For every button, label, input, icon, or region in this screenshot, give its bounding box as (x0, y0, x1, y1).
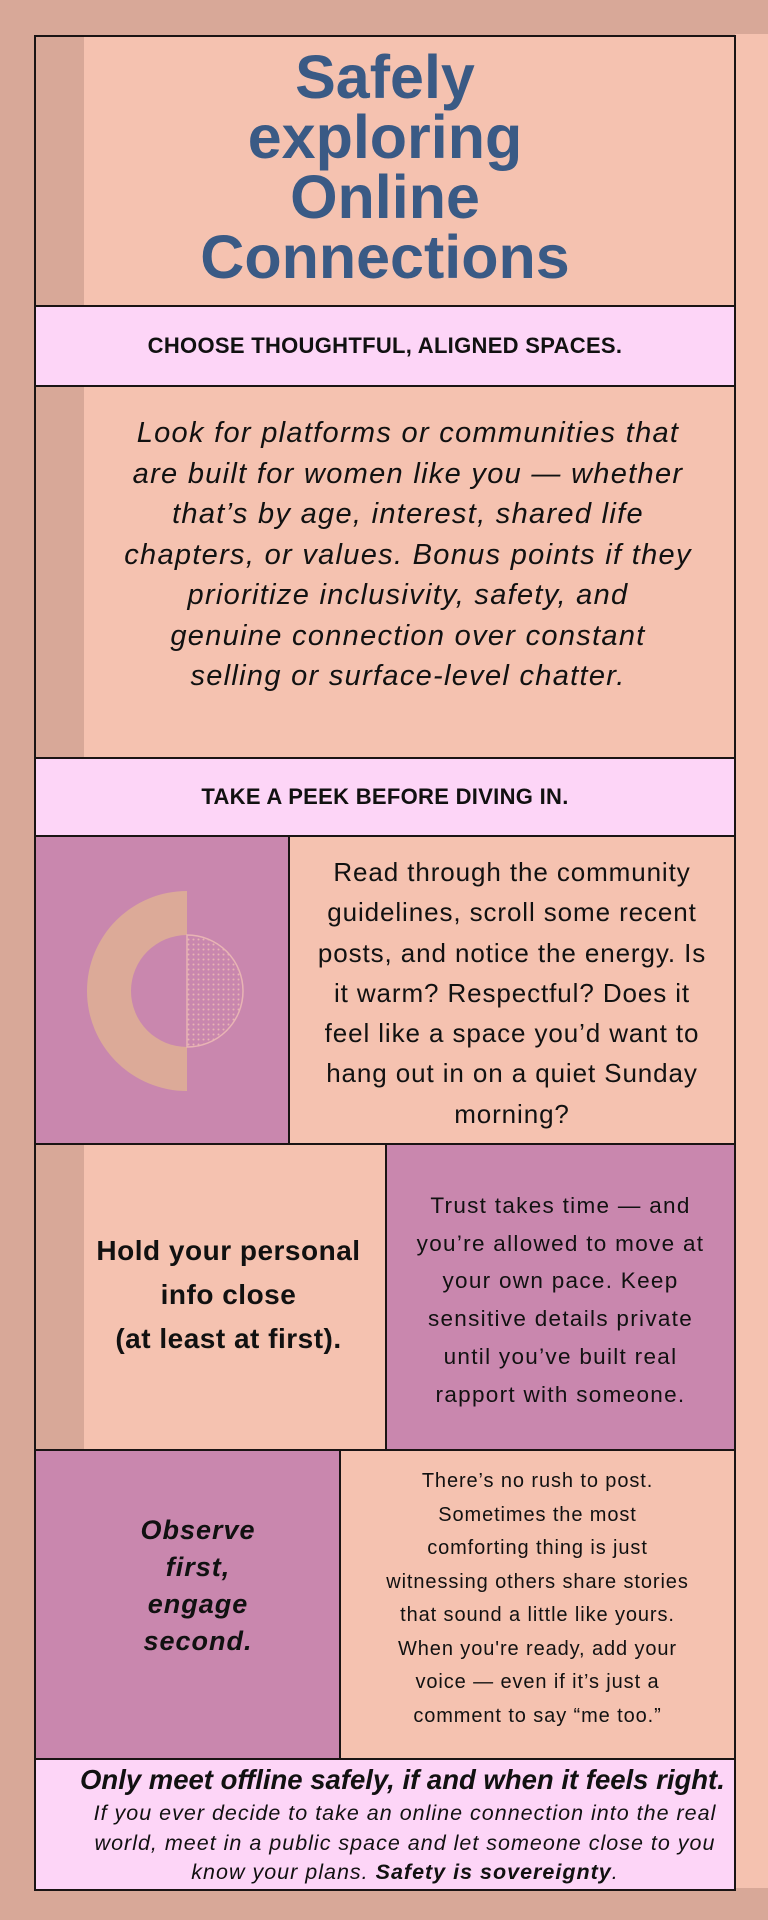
panel: meet offline (34, 1758, 736, 1891)
panel: observe text: witnessing others share stories (386, 1570, 689, 1592)
choose body text (124, 417, 692, 692)
panel: peek text (288, 835, 736, 1145)
panel: trust text: sensitive details private (428, 1306, 693, 1331)
offline body: If you ever decide to take an online connection into the real (94, 1801, 716, 1825)
panel: trust text: until you’ve built real (444, 1344, 677, 1369)
panel: peek text: it warm? Respectful? Does it (334, 978, 690, 1008)
panel: observe text: that sound a little like yours. (400, 1604, 675, 1626)
title: exploring (248, 103, 522, 171)
heading: choose spaces: CHOOSE THOUGHTFUL, ALIGNED SPACES. (148, 333, 622, 358)
choose body text: selling or surface-level chatter. (190, 660, 626, 692)
panel: observe heading: engage (148, 1589, 248, 1619)
offline body: know your plans. Safety is sovereignty. (191, 1860, 619, 1884)
panel: hold info (34, 1143, 387, 1451)
panel: trust text (385, 1143, 736, 1451)
choose body text: that’s by age, interest, shared life (172, 498, 644, 530)
choose body text: genuine connection over constant (170, 620, 646, 652)
panel: observe heading: Observe (140, 1515, 256, 1545)
offline heading: Only meet offline safely, if and when it feels right. (80, 1764, 725, 1795)
panel: trust text: your own pace. Keep (442, 1268, 679, 1293)
panel: peek text: guidelines, scroll some recent (327, 897, 697, 927)
panel: trust text: you’re allowed to move at (417, 1231, 704, 1256)
panel: peek text: morning? (454, 1099, 570, 1129)
panel: peek text: hang out in on a quiet Sunday (326, 1058, 698, 1088)
panel: observe text: voice — even if it’s just a (415, 1671, 660, 1693)
panel: observe text: comforting thing is just (427, 1537, 648, 1559)
panel: observe heading: second. (143, 1626, 253, 1656)
hold heading: info close (161, 1279, 296, 1310)
title: Connections (200, 223, 570, 291)
panel: observe heading (34, 1449, 341, 1760)
choose body text: Look for platforms or communities that (137, 417, 679, 449)
choose body text: chapters, or values. Bonus points if they (124, 538, 692, 570)
panel: observe text (339, 1449, 736, 1760)
hold heading: (at least at first). (115, 1323, 342, 1354)
hold heading (96, 1235, 361, 1354)
panel: peek text: posts, and notice the energy. Is (318, 938, 706, 968)
icon: half ring (87, 891, 244, 1091)
right peach strip (735, 34, 768, 1888)
panel: observe heading: first, (166, 1552, 230, 1582)
panel: observe text: When you're ready, add your (398, 1638, 677, 1660)
panel: peek text: feel like a space you’d want to (325, 1018, 699, 1048)
offline body: world, meet in a public space and let someone close to you (95, 1830, 715, 1854)
panel: trust text: rapport with someone. (436, 1382, 685, 1407)
panel: trust text: Trust takes time — and (430, 1193, 691, 1218)
title (200, 43, 570, 291)
panel: peek text: Read through the community (333, 857, 691, 887)
title: Safely (295, 43, 475, 111)
hold heading: Hold your personal (96, 1235, 361, 1266)
heading: take a peek (34, 757, 736, 837)
panel: observe text: comment to say “me too.” (413, 1704, 662, 1726)
choose body text: prioritize inclusivity, safety, and (188, 579, 628, 611)
heading: choose spaces (34, 305, 736, 387)
title: Online (290, 163, 480, 231)
title panel (34, 35, 736, 307)
panel: choose text (34, 385, 736, 759)
panel: peek graphic (34, 835, 290, 1145)
panel: observe text: There’s no rush to post. (422, 1470, 653, 1492)
choose body text: are built for women like you — whether (133, 458, 683, 490)
heading: take a peek: TAKE A PEEK BEFORE DIVING IN. (201, 784, 569, 809)
panel: observe text: Sometimes the most (438, 1504, 637, 1526)
offline body (94, 1801, 716, 1884)
